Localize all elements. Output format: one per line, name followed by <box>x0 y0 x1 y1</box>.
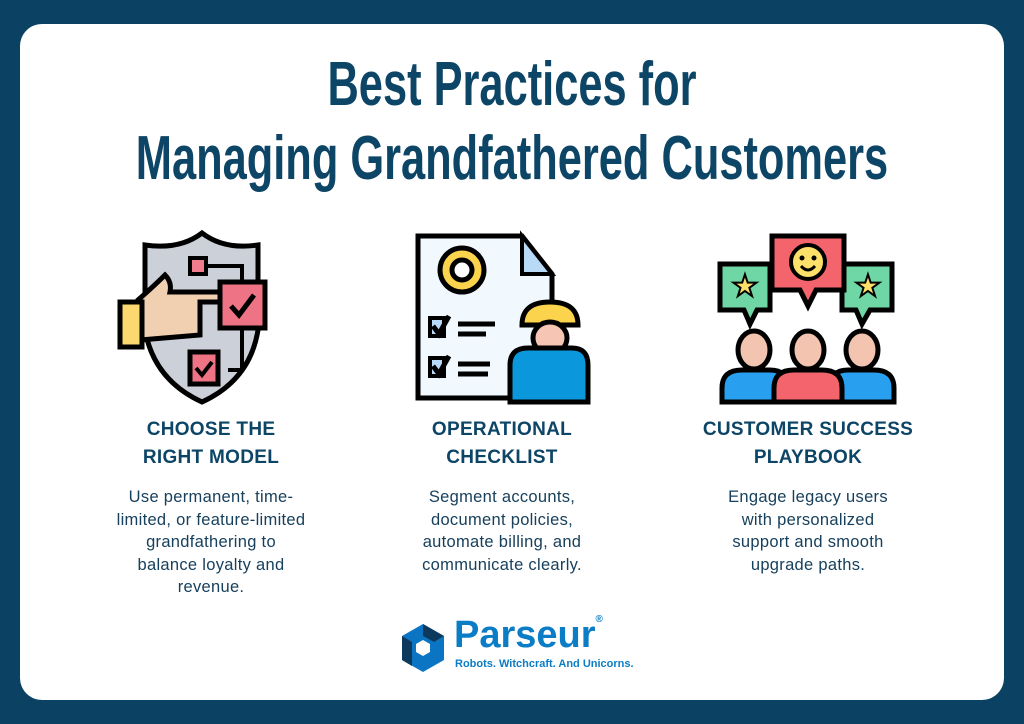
column: customer success playbook: upgrade paths. <box>751 556 865 574</box>
column: choose the right model: CHOOSE THE <box>147 419 275 440</box>
column: customer success playbook: Engage legacy users <box>728 488 888 506</box>
column: choose the right model: balance loyalty and <box>138 556 284 574</box>
logo: Parseur: Robots. Witchcraft. And Unicorns. <box>455 658 634 670</box>
icon: customers with feedback: ★ <box>732 270 758 303</box>
column: customer success playbook: with personalized <box>742 510 874 528</box>
column: operational checklist: Segment accounts, <box>429 488 575 506</box>
column: operational checklist: CHECKLIST <box>446 447 558 468</box>
column: choose the right model: Use permanent, time- <box>129 488 293 506</box>
icon: checklist with worker <box>416 230 590 404</box>
column: choose the right model: limited, or feature-limited <box>117 510 305 528</box>
column: operational checklist: OPERATIONAL <box>432 419 572 440</box>
column: operational checklist <box>422 419 582 574</box>
logo text: Parseur® <box>454 614 603 656</box>
title: Managing Grandfathered Customers <box>136 124 888 193</box>
icon: shield with hand <box>118 230 268 405</box>
column: choose the right model: revenue. <box>178 578 244 596</box>
icon: customers with feedback: ★ <box>855 270 881 303</box>
icon: customers with feedback <box>718 234 896 404</box>
column: choose the right model: RIGHT MODEL <box>143 447 279 468</box>
column: operational checklist: automate billing, and <box>423 533 581 551</box>
column: customer success playbook: CUSTOMER SUCCESS <box>703 419 913 440</box>
column: choose the right model <box>117 419 305 596</box>
column: operational checklist: document policies, <box>431 510 573 528</box>
column: customer success playbook: support and smooth <box>732 533 884 551</box>
title <box>136 50 888 193</box>
column: customer success playbook: PLAYBOOK <box>754 447 862 468</box>
title: Best Practices for <box>327 50 697 119</box>
column: operational checklist: communicate clearly. <box>422 556 582 574</box>
column: customer success playbook <box>703 419 913 574</box>
logo icon <box>402 624 444 672</box>
column: choose the right model: grandfathering to <box>146 533 276 551</box>
logo: Parseur <box>402 614 634 672</box>
